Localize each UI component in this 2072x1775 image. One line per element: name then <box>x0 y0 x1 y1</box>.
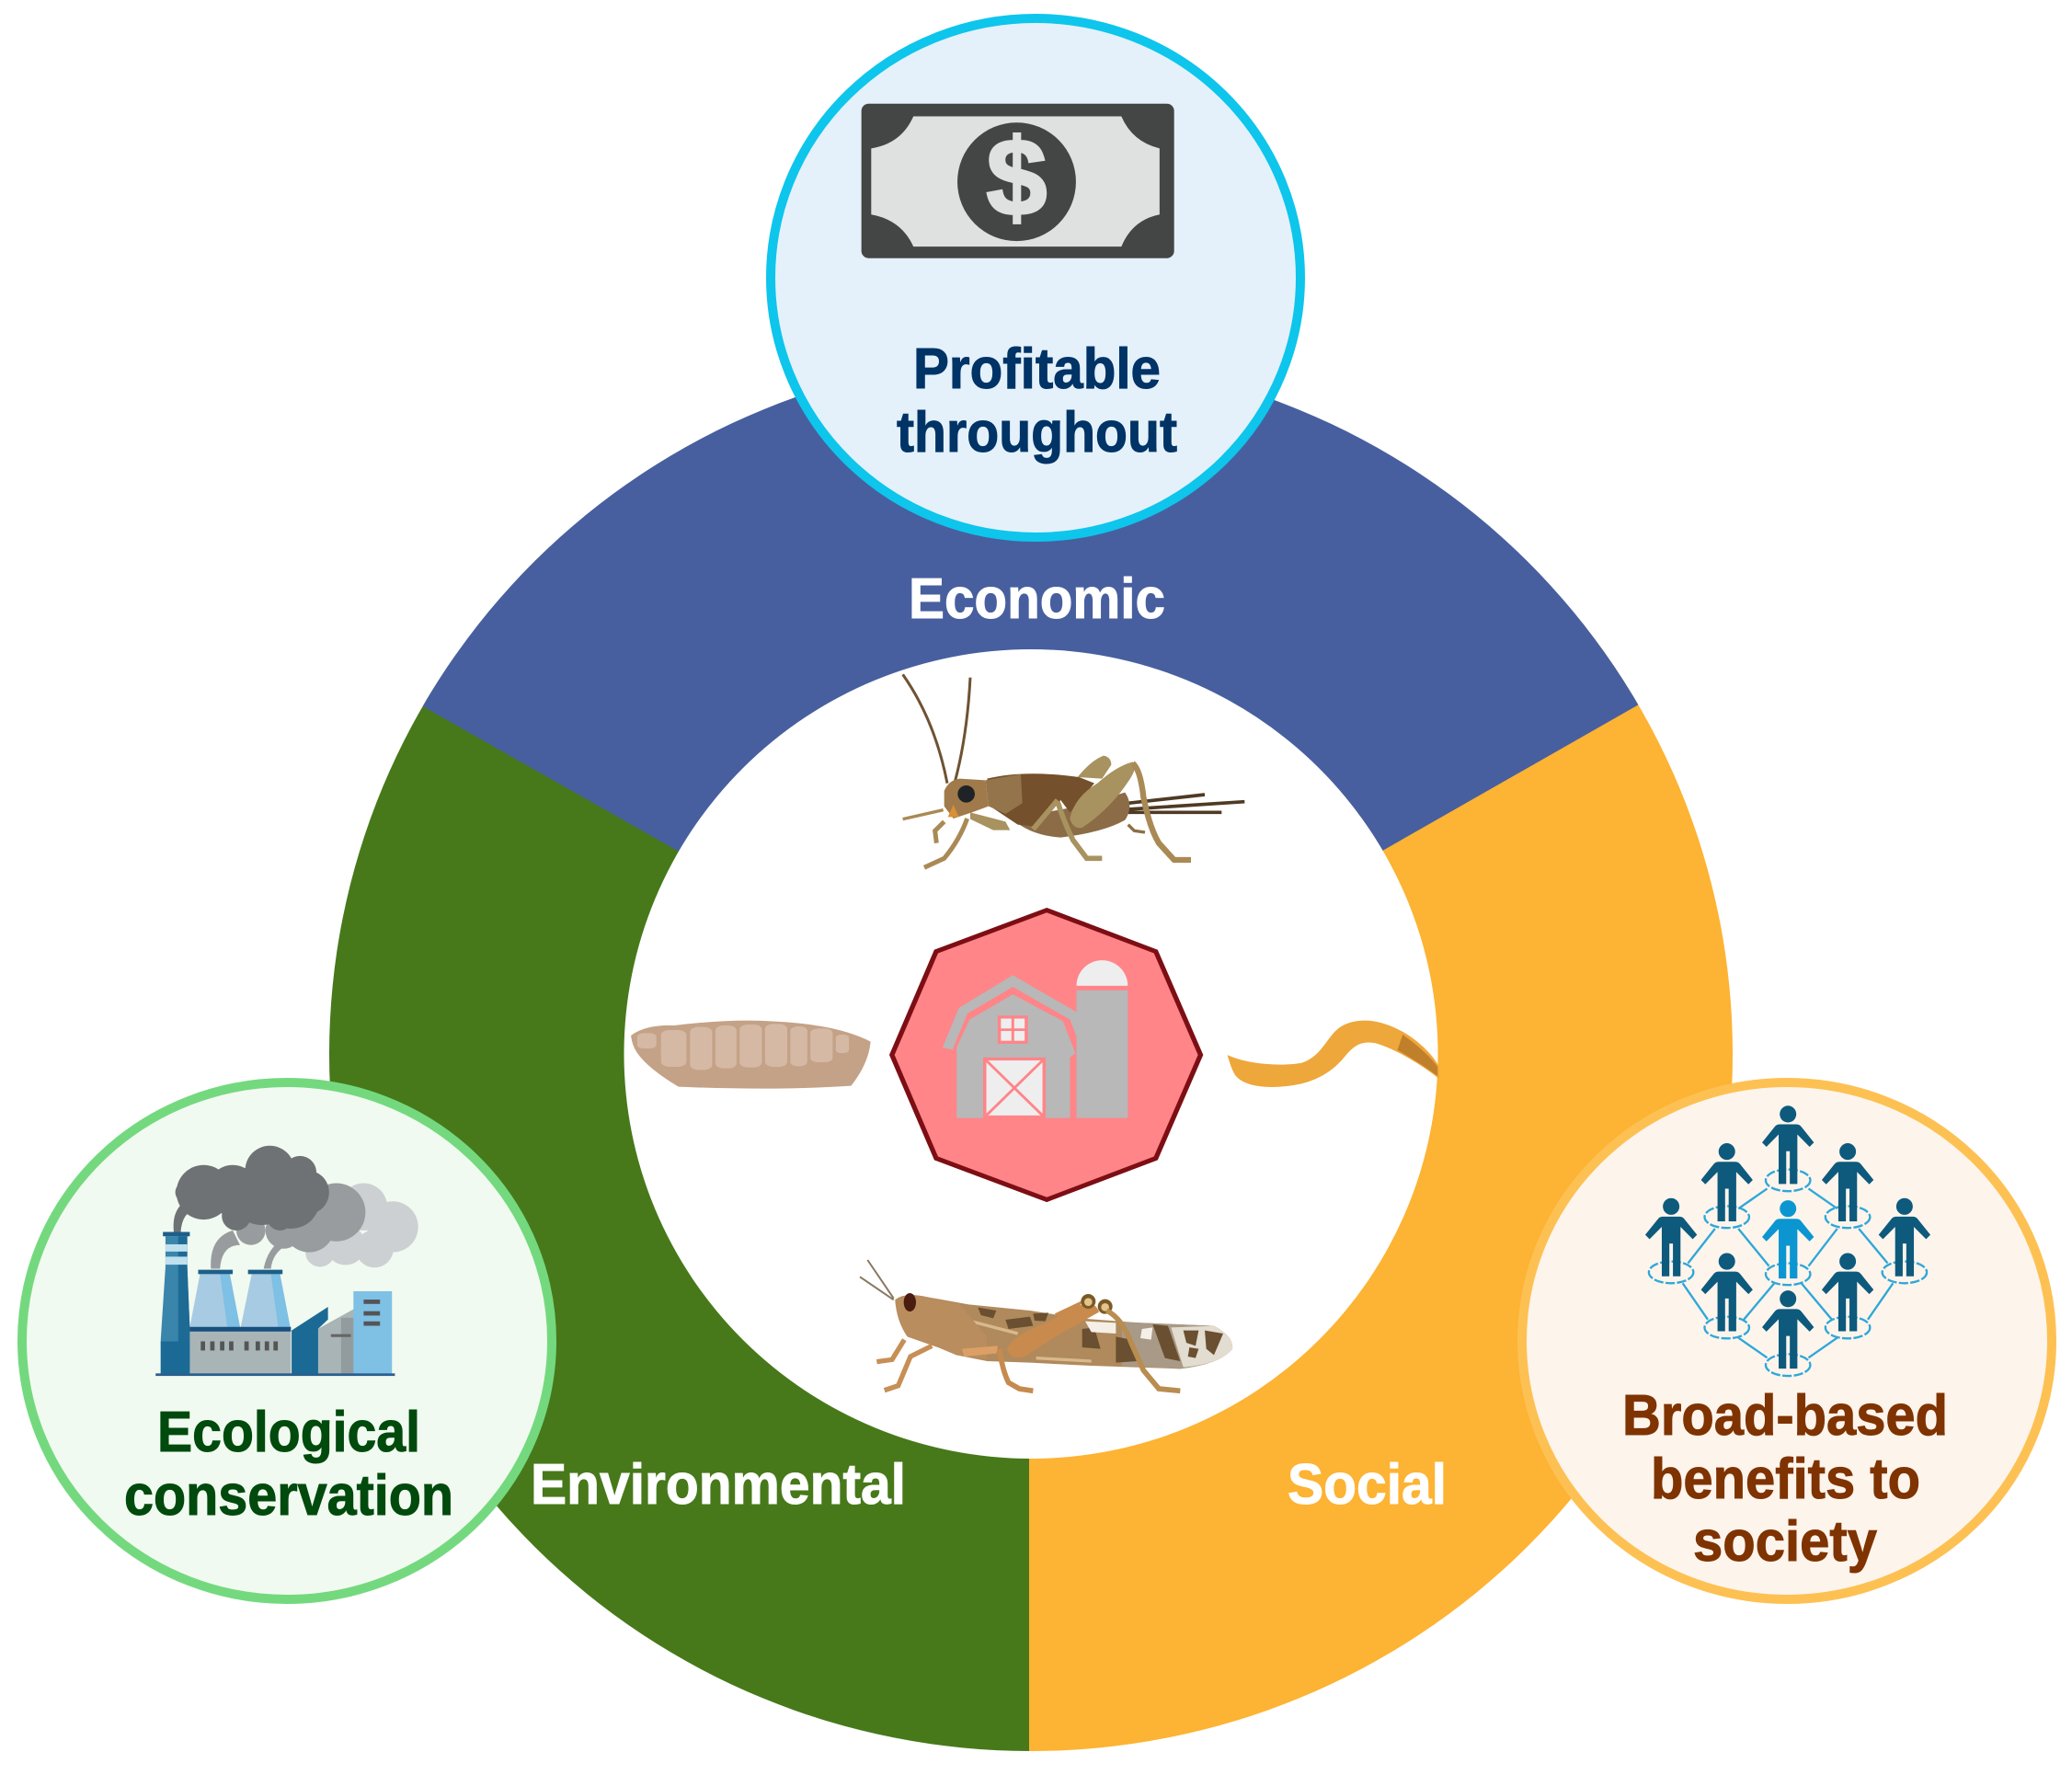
centre illustrations <box>631 674 1437 1391</box>
heading: Broad-based benefits to society: society <box>1693 1510 1877 1574</box>
heading: Profitable throughout: Profitable <box>913 338 1161 401</box>
icon: mealworm <box>1230 1022 1437 1086</box>
circle: ecological <box>22 1082 552 1599</box>
heading: Broad-based benefits to society <box>1622 1384 1948 1574</box>
label: Social: Social <box>1288 1453 1447 1517</box>
panel: economic benefit circle <box>771 18 1300 537</box>
heading: Profitable throughout <box>897 338 1177 464</box>
heading: Ecological conservation: Ecological <box>157 1401 420 1464</box>
icon: grub larva <box>631 1021 871 1089</box>
panel: ecological benefit circle <box>22 1082 552 1599</box>
octagon badge <box>892 910 1200 1199</box>
panel: social benefit circle <box>1522 1082 2052 1599</box>
heading: Profitable throughout: throughout <box>897 401 1177 464</box>
icon: cricket <box>903 674 1244 867</box>
heading: Ecological conservation: conservation <box>124 1464 453 1528</box>
heading: Broad-based benefits to society: benefits to <box>1651 1448 1920 1511</box>
icon: banknote: $ <box>986 117 1047 238</box>
label: Environmental: Environmental <box>531 1453 906 1517</box>
label: Economic: Economic <box>909 567 1165 631</box>
ring diagram <box>329 397 1733 1751</box>
circle: social <box>1522 1082 2052 1599</box>
icon: locust <box>860 1260 1232 1391</box>
ring segments <box>329 397 1733 1751</box>
icon: factory <box>155 1146 418 1376</box>
ring segment: social <box>1029 624 1733 1751</box>
silo <box>1077 960 1128 1118</box>
inner white disc <box>624 649 1438 1459</box>
icon: people network <box>1645 1105 1930 1376</box>
heading: Broad-based benefits to society: Broad-based <box>1622 1384 1948 1448</box>
icon: banknote <box>862 104 1174 258</box>
icon: farm badge <box>892 910 1200 1199</box>
barn <box>943 975 1088 1118</box>
ring segment: economic <box>423 397 1639 852</box>
circle: economic <box>771 18 1300 537</box>
ring segment: environmental <box>329 654 1029 1751</box>
heading: Ecological conservation <box>124 1401 453 1528</box>
